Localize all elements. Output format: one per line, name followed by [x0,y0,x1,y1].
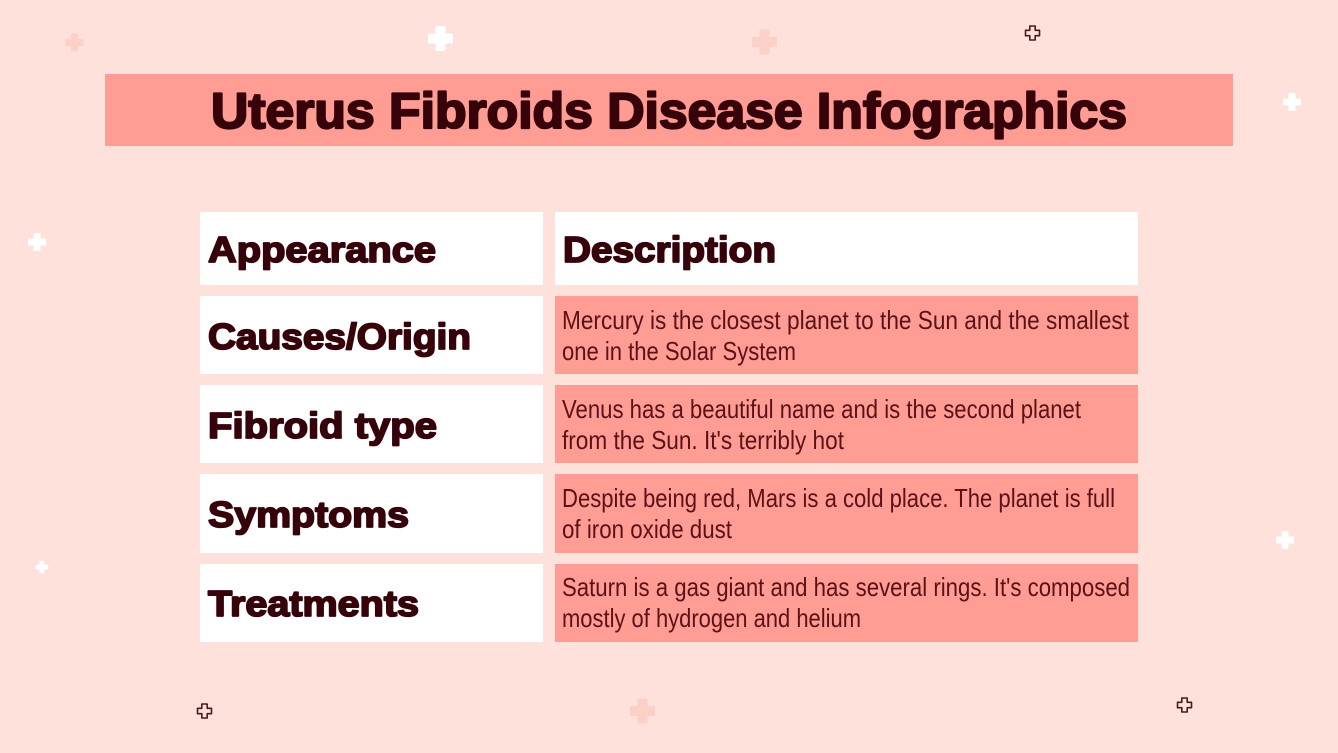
row: treatments: mostly of hydrogen and helium [562,603,861,633]
row: treatments [200,564,1138,642]
row: treatments: Saturn is a gas giant and has several rings. It's composed [562,572,1130,602]
row: causes/origin: one in the Solar System [562,336,796,366]
row: symptoms: of iron oxide dust [562,514,733,544]
title banner [105,74,1233,146]
icon: white plus left [29,234,45,250]
header row: Description [563,229,776,270]
row: fibroid type: Venus has a beautiful name and is the second planet [562,394,1082,424]
icon: outlined plus bottom left [198,704,212,718]
icon: outlined plus bottom right [1178,698,1192,712]
icon: white plus right [1284,94,1300,110]
icon: pale plus top left [66,34,82,50]
header row: Appearance [208,229,436,270]
title: Uterus Fibroids Disease Infographics [211,83,1127,139]
row: fibroid type: Fibroid type [208,405,437,446]
row: causes/origin [200,296,1138,374]
icon: pale plus bottom centre [631,700,654,722]
row: fibroid type [200,385,1138,463]
row: causes/origin: Mercury is the closest planet to the Sun and the smallest [562,305,1130,335]
row: fibroid type: from the Sun. It's terribly hot [562,425,845,455]
icon: small white plus lower left [36,562,48,572]
icon: white plus lower right [1277,532,1293,548]
row: treatments: Treatments [208,583,419,624]
row: symptoms: Despite being red, Mars is a cold place. The planet is full [562,483,1115,513]
row: causes/origin: Causes/Origin [208,316,471,357]
row: symptoms [200,474,1138,553]
icon: white plus top [429,27,452,50]
icon: outlined plus top right [1026,26,1040,40]
icon: pale plus top centre [753,30,776,54]
header row [200,212,1138,285]
row: symptoms: Symptoms [208,494,409,535]
table [200,212,1138,642]
